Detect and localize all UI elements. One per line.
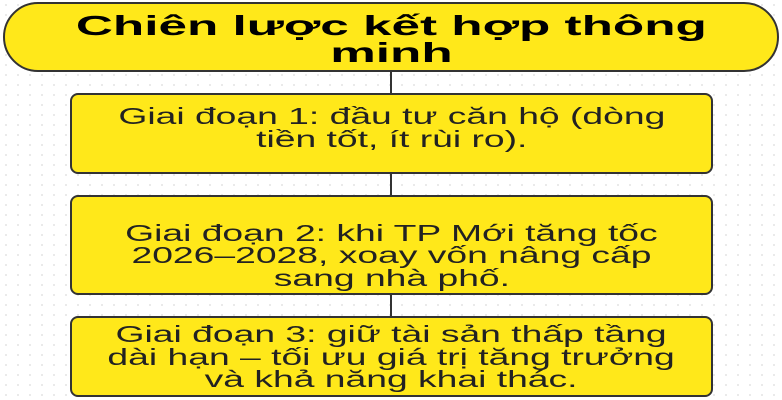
- panel: stage 1: [70, 93, 713, 174]
- panel: stage 3: [70, 316, 713, 397]
- title: minh: [330, 37, 452, 68]
- connector line: [390, 70, 392, 320]
- title: Chiên lược kết hợp thông: [76, 10, 706, 41]
- panel: stage 1: tiền tốt, ít rùi ro).: [256, 126, 527, 152]
- panel: stage 3: dài hạn – tối ưu giá trị tăng trưởng: [108, 344, 675, 370]
- title: [3, 2, 779, 72]
- panel: stage 2: 2026–2028, xoay vốn nâng cấp: [131, 242, 652, 268]
- panel: stage 3: Giai đoạn 3: giữ tài sản thấp tầng: [116, 321, 667, 347]
- panel: stage 3: và khả năng khai thác.: [205, 366, 578, 392]
- panel: stage 1: Giai đoạn 1: đầu tư căn hộ (dòng: [118, 103, 665, 129]
- panel: stage 2: Giai đoạn 2: khi TP Mới tăng tốc: [125, 220, 658, 246]
- panel: stage 2: [70, 195, 713, 295]
- panel: stage 2: sang nhà phố.: [273, 265, 510, 291]
